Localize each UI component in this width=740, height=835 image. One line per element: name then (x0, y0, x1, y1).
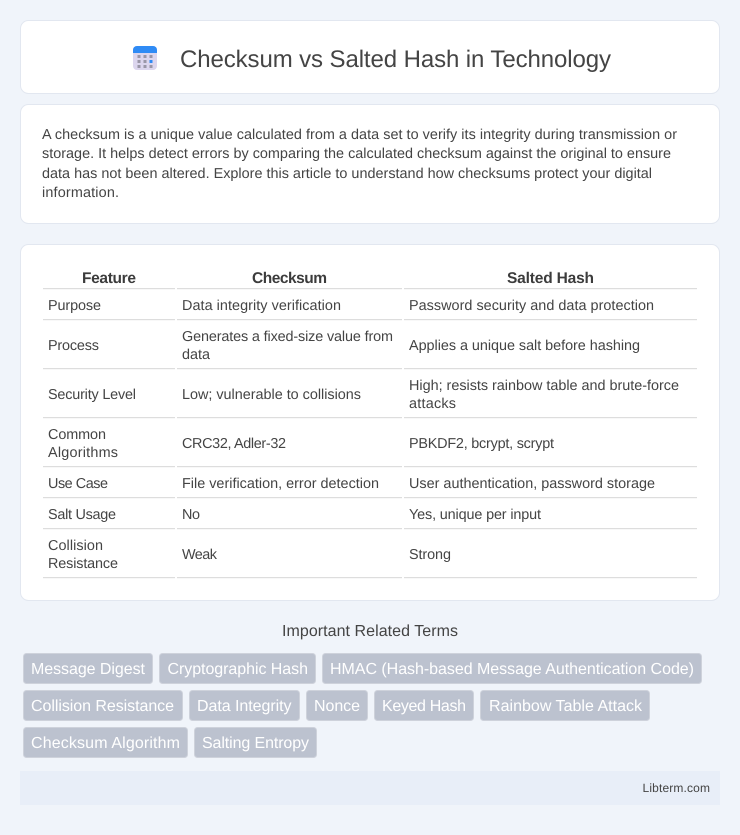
table row: Process (43, 329, 697, 369)
description text: A checksum is a unique value calculated from a data set to verify its integrity during transmission or (42, 127, 677, 143)
table row: Process: Generates a fixed-size value from (182, 329, 393, 345)
table row: Use Case: File verification, error detection (182, 476, 379, 492)
title: Checksum vs Salted Hash in Technology (180, 46, 611, 73)
description text (42, 127, 677, 201)
tag: Message Digest (24, 654, 152, 684)
footer credit: Libterm.com (642, 781, 710, 795)
table row: Collision Resistance: Resistance (48, 556, 118, 572)
table row: Use Case (43, 476, 697, 498)
table row: Collision Resistance: Weak (182, 547, 218, 563)
table row: Process: data (182, 347, 210, 363)
tag: HMAC (322, 654, 702, 684)
table row: Common Algorithms (43, 427, 697, 467)
table row: Collision Resistance: Strong (409, 547, 451, 563)
tag: Nonce (306, 690, 368, 720)
table row: Security Level: Security Level (48, 387, 136, 403)
table header row: Salted Hash (507, 270, 594, 287)
tag: Salting Entropy (194, 728, 316, 758)
tag list (24, 654, 702, 758)
footer (20, 771, 720, 805)
table row: Security Level: attacks (409, 396, 456, 412)
description text: information. (42, 185, 119, 201)
table row: Purpose: Password security and data protection (409, 298, 654, 314)
table row: Security Level: Low; vulnerable to collisions (182, 387, 361, 403)
tag: Keyed Hash: Keyed Hash (382, 698, 466, 715)
heading: important related terms: Important Related Terms (282, 623, 458, 640)
table row: Common Algorithms: PBKDF2, bcrypt, scrypt (409, 436, 554, 452)
tag: Checksum Algorithm (24, 728, 188, 758)
panel: title card (20, 20, 720, 94)
table header row: Feature (82, 270, 136, 287)
table row: Common Algorithms: Algorithms (48, 445, 118, 461)
tag: Collision Resistance: Collision Resistance (31, 698, 174, 715)
table row: Security Level (43, 378, 697, 418)
table row: Common Algorithms: CRC32, Adler-32 (182, 436, 286, 452)
tag: Data Integrity (190, 690, 300, 720)
description text: storage. It helps detect errors by comparing the calculated checksum against the original to ensure (42, 146, 671, 162)
table row: Salt Usage: No (182, 507, 200, 523)
tag: Collision Resistance (24, 690, 182, 720)
tag: Rainbow Table Attack (480, 690, 650, 720)
table row: Collision Resistance (43, 538, 697, 578)
table row: Common Algorithms: Common (48, 427, 106, 443)
table row: Use Case: User authentication, password storage (409, 476, 655, 492)
table row: Security Level: High; resists rainbow table and brute-force (409, 378, 679, 394)
table row: Purpose: Data integrity verification (182, 298, 341, 314)
table row: Use Case: Use Case (48, 476, 108, 492)
tag: Salting Entropy: Salting Entropy (202, 735, 309, 752)
tag: HMAC: HMAC (Hash-based Message Authentication Code) (330, 661, 694, 678)
table row: Salt Usage: Salt Usage (48, 507, 116, 523)
tag: Nonce: Nonce (314, 698, 360, 715)
table row: Collision Resistance: Collision (48, 538, 103, 554)
table row: Purpose (43, 298, 697, 320)
panel: description card (20, 104, 720, 224)
table row: Process: Process (48, 338, 99, 354)
table header row: Checksum (252, 270, 327, 287)
icon: calendar grid (133, 46, 157, 70)
tag: Keyed Hash (374, 690, 474, 720)
table row: Process: Applies a unique salt before hashing (409, 338, 640, 354)
panel: comparison table (20, 244, 720, 600)
tag: Cryptographic Hash: Cryptographic Hash (168, 661, 308, 678)
tag: Data Integrity: Data Integrity (197, 698, 292, 715)
tag: Cryptographic Hash (160, 654, 316, 684)
table header row (43, 270, 697, 289)
tag: Rainbow Table Attack: Rainbow Table Attack (489, 698, 643, 715)
tag: Message Digest: Message Digest (31, 661, 146, 678)
table row: Salt Usage: Yes, unique per input (409, 507, 541, 523)
table row: Salt Usage (43, 507, 697, 529)
description text: data has not been altered. Explore this article to understand how checksums protect your digital (42, 166, 652, 182)
tag: Checksum Algorithm: Checksum Algorithm (31, 735, 180, 752)
table row: Purpose: Purpose (48, 298, 101, 314)
